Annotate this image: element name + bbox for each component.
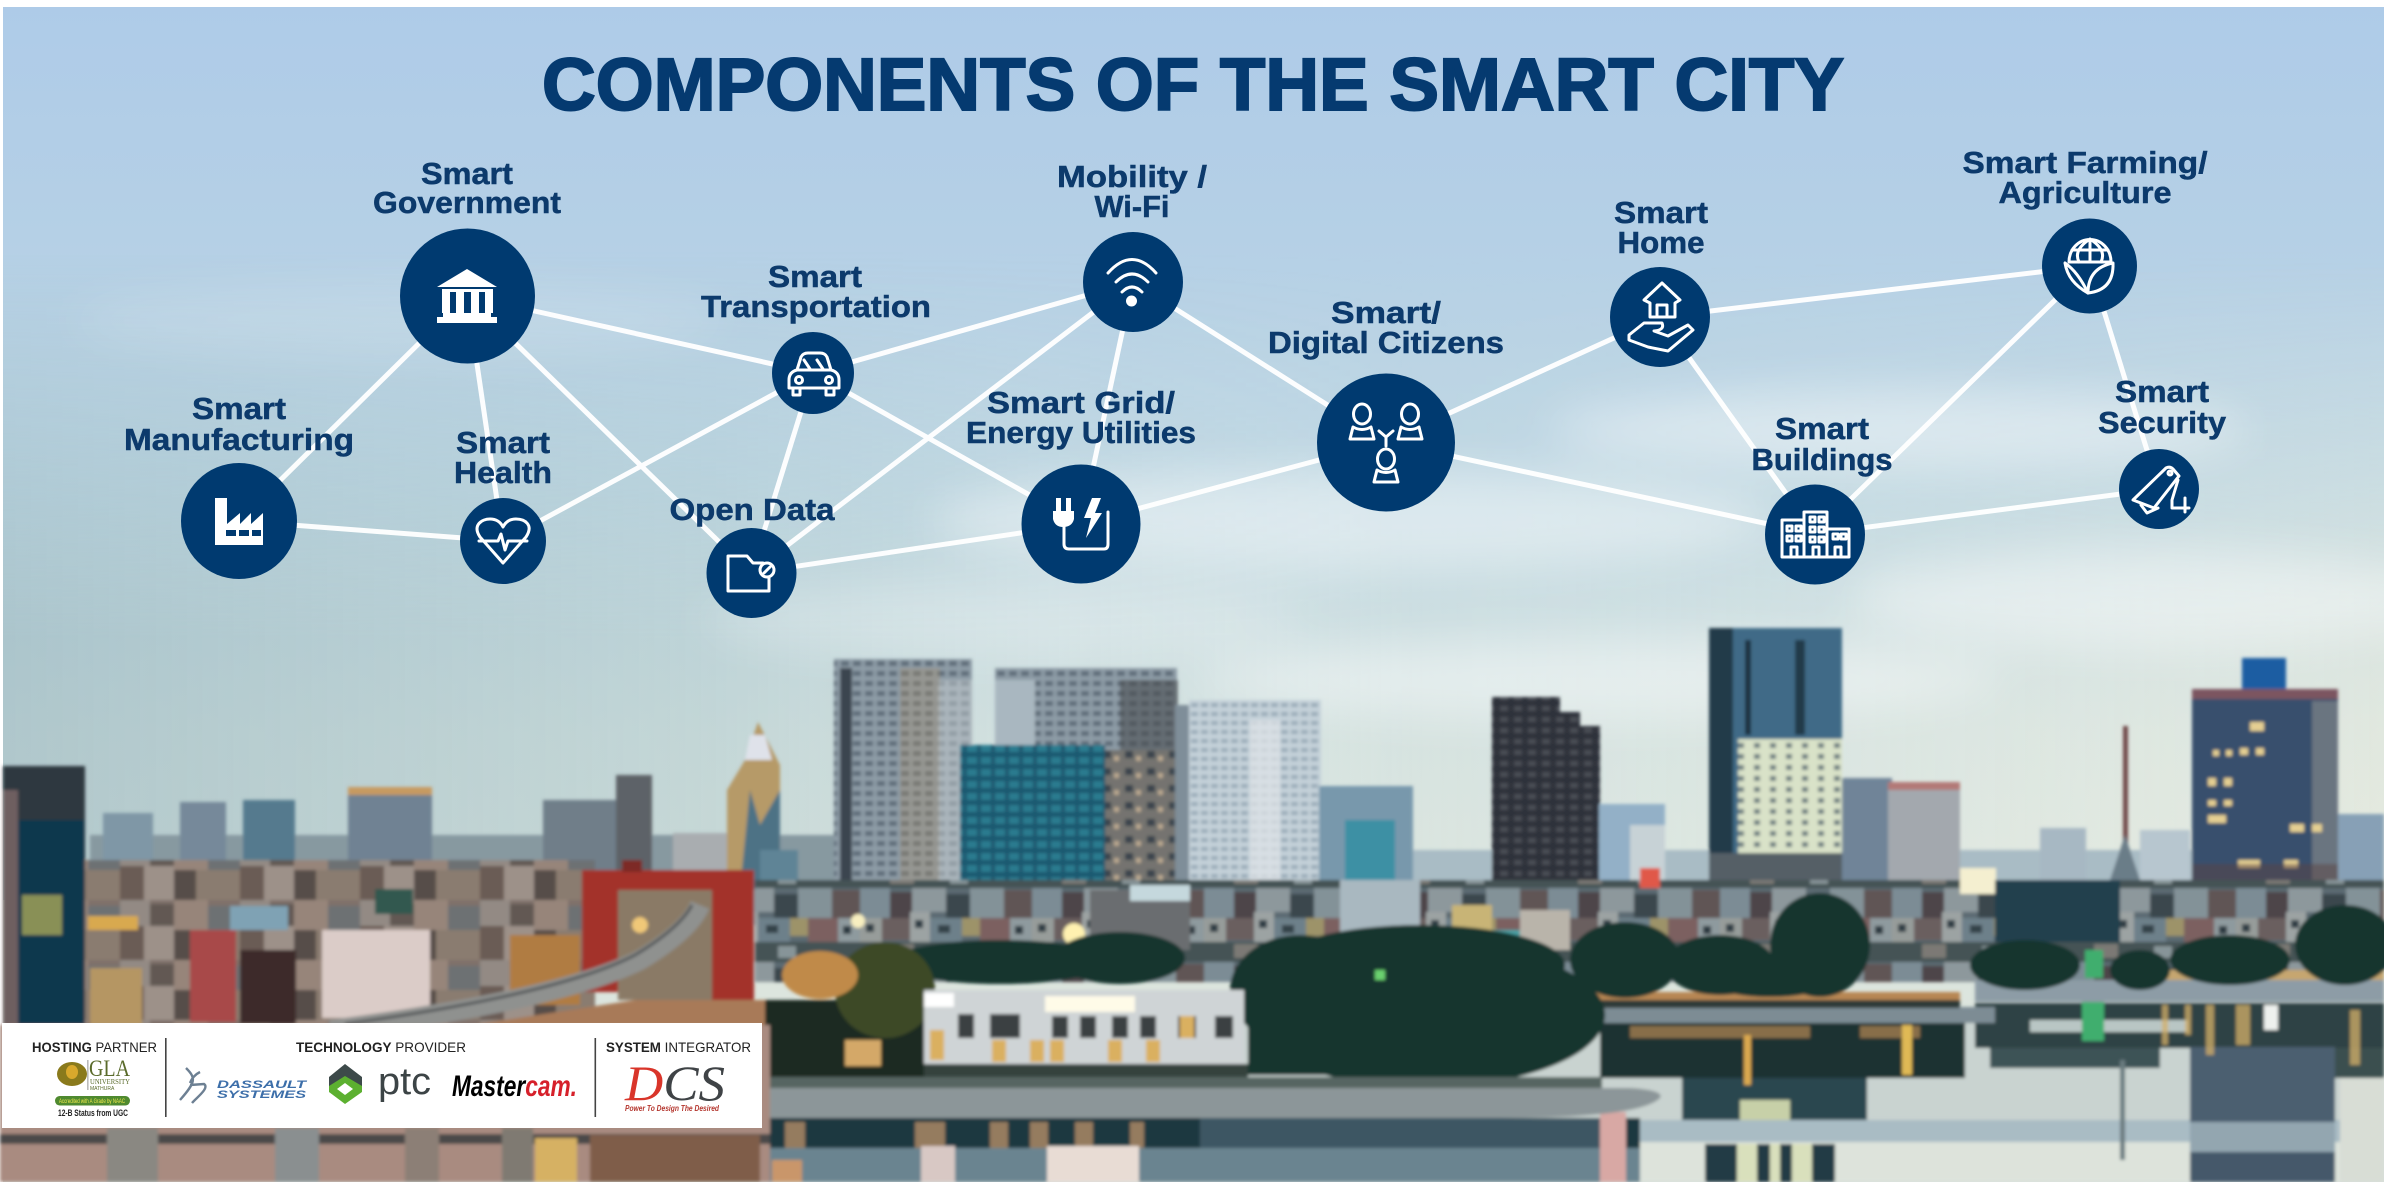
grey tower [834, 659, 972, 914]
node: Mobility / Wi-Fi: Wi-Fi [1094, 189, 1170, 224]
left trees [760, 1000, 930, 1080]
logo: GLA University: GLA [89, 1056, 130, 1081]
glass building [960, 745, 1105, 915]
node: Smart Transportation: Transportation [701, 289, 931, 324]
houses [755, 880, 2384, 982]
heading: hosting partner: HOSTING PARTNER [32, 1039, 157, 1055]
icon: folder with check [728, 556, 774, 591]
right blue tower [2242, 658, 2286, 692]
water [760, 1020, 2384, 1182]
icon: factory [215, 498, 263, 545]
node: Smart Health [454, 425, 552, 584]
node: Smart Government [373, 156, 561, 364]
node: Smart Home [1610, 195, 1710, 367]
twin tower [995, 668, 1177, 918]
node: Open Data [670, 492, 835, 618]
distant haze [90, 835, 890, 925]
node: Smart Health: Health [454, 455, 552, 490]
node: Smart Home: Smart [1614, 195, 1708, 230]
logo: PTC [329, 1061, 431, 1104]
heading: system integrator: SYSTEM INTEGRATOR [606, 1039, 751, 1055]
icon: government building [437, 269, 497, 323]
tall blue tower [1709, 628, 1842, 893]
left tall building [85, 860, 595, 1030]
node: Smart Manufacturing: Smart [192, 391, 286, 426]
node: Smart Security [2098, 374, 2227, 529]
logo: DCS: Power To Design The Desired [625, 1104, 720, 1113]
node: Smart Farming / Agriculture: Smart Farming/ [1962, 145, 2208, 180]
node: Smart Grid / Energy Utilities: Energy Utilities [966, 415, 1196, 450]
node: Smart Transportation: Smart [768, 259, 862, 294]
logo: Mastercam: Mastercam. [452, 1070, 577, 1103]
node: Smart / Digital Citizens: Smart/ [1331, 295, 1441, 330]
logo: GLA University: MATHURA [90, 1086, 115, 1092]
node: Smart / Digital Citizens [1268, 295, 1504, 512]
logo: GLA University: 12-B Status from UGC [58, 1108, 128, 1118]
logo: Dassault Systemes [180, 1068, 308, 1103]
node: Open Data: Open Data [670, 492, 835, 527]
node: Smart Buildings [1752, 411, 1892, 584]
node: Smart Security: Security [2098, 405, 2227, 440]
icon: car [789, 353, 839, 395]
palace [924, 990, 1244, 1075]
red gate [582, 870, 754, 890]
icon: people network [1350, 404, 1422, 482]
icon: security camera [2133, 467, 2189, 513]
title: COMPONENTS OF THE SMART CITY [542, 43, 1844, 126]
node: Smart Security: Smart [2115, 374, 2209, 409]
icon: wifi [1108, 260, 1156, 305]
icon: house on hand [1629, 283, 1693, 351]
icon: globe and leaves [2065, 239, 2113, 293]
node: Smart Transportation [701, 259, 931, 414]
node: Smart Buildings: Smart [1775, 411, 1869, 446]
heading: technology provider: TECHNOLOGY PROVIDER [296, 1039, 466, 1055]
node: Smart Health: Smart [456, 425, 550, 460]
logo: Dassault Systemes: DASSAULT [217, 1079, 308, 1091]
node: Smart / Digital Citizens: Digital Citizens [1268, 325, 1504, 360]
lower left strip [0, 1025, 770, 1182]
white tower [1175, 705, 1195, 895]
node: Mobility / Wi-Fi [1057, 159, 1207, 332]
logo: DCS: DCS [624, 1055, 725, 1111]
logo: Dassault Systemes: SYSTEMES [217, 1089, 307, 1101]
antenna [2123, 726, 2128, 856]
golden tower [727, 722, 780, 890]
logo: GLA University: Accredited with A Grade by NAAC [59, 1098, 125, 1105]
panel: partner logos [2, 1023, 762, 1128]
node: Smart Home: Home [1618, 225, 1704, 260]
curved road [330, 905, 700, 1030]
dark tower [1492, 697, 1600, 892]
node: Smart Government: Government [373, 185, 561, 220]
node: Smart Manufacturing [124, 391, 354, 579]
logo: GLA University [55, 1056, 130, 1118]
node: Smart Farming / Agriculture [1962, 145, 2208, 314]
node: Smart Grid / Energy Utilities [966, 385, 1196, 584]
logo: PTC: ptc [378, 1061, 431, 1103]
logo: GLA University: UNIVERSITY [90, 1078, 130, 1086]
icon: heart with pulse [477, 519, 529, 563]
reflections dark near banks [1600, 1023, 1965, 1078]
promenade [762, 1088, 1661, 1118]
bank far right [1560, 992, 1960, 1000]
node: Smart Buildings: Buildings [1752, 442, 1892, 477]
node: Mobility / Wi-Fi: Mobility / [1057, 159, 1207, 194]
icon: buildings [1782, 512, 1849, 557]
node: Smart Manufacturing: Manufacturing [124, 422, 354, 457]
city skyline photo [0, 628, 2384, 1182]
trees [890, 893, 2384, 1087]
node: Smart Grid / Energy Utilities: Smart Grid/ [987, 385, 1175, 420]
water under promenade [760, 1118, 1640, 1148]
node: Smart Farming / Agriculture: Agriculture [1998, 175, 2172, 210]
network connecting lines [239, 266, 2159, 573]
node: Smart Government: Smart [421, 156, 513, 191]
icon: plug and bolt [1053, 498, 1108, 549]
